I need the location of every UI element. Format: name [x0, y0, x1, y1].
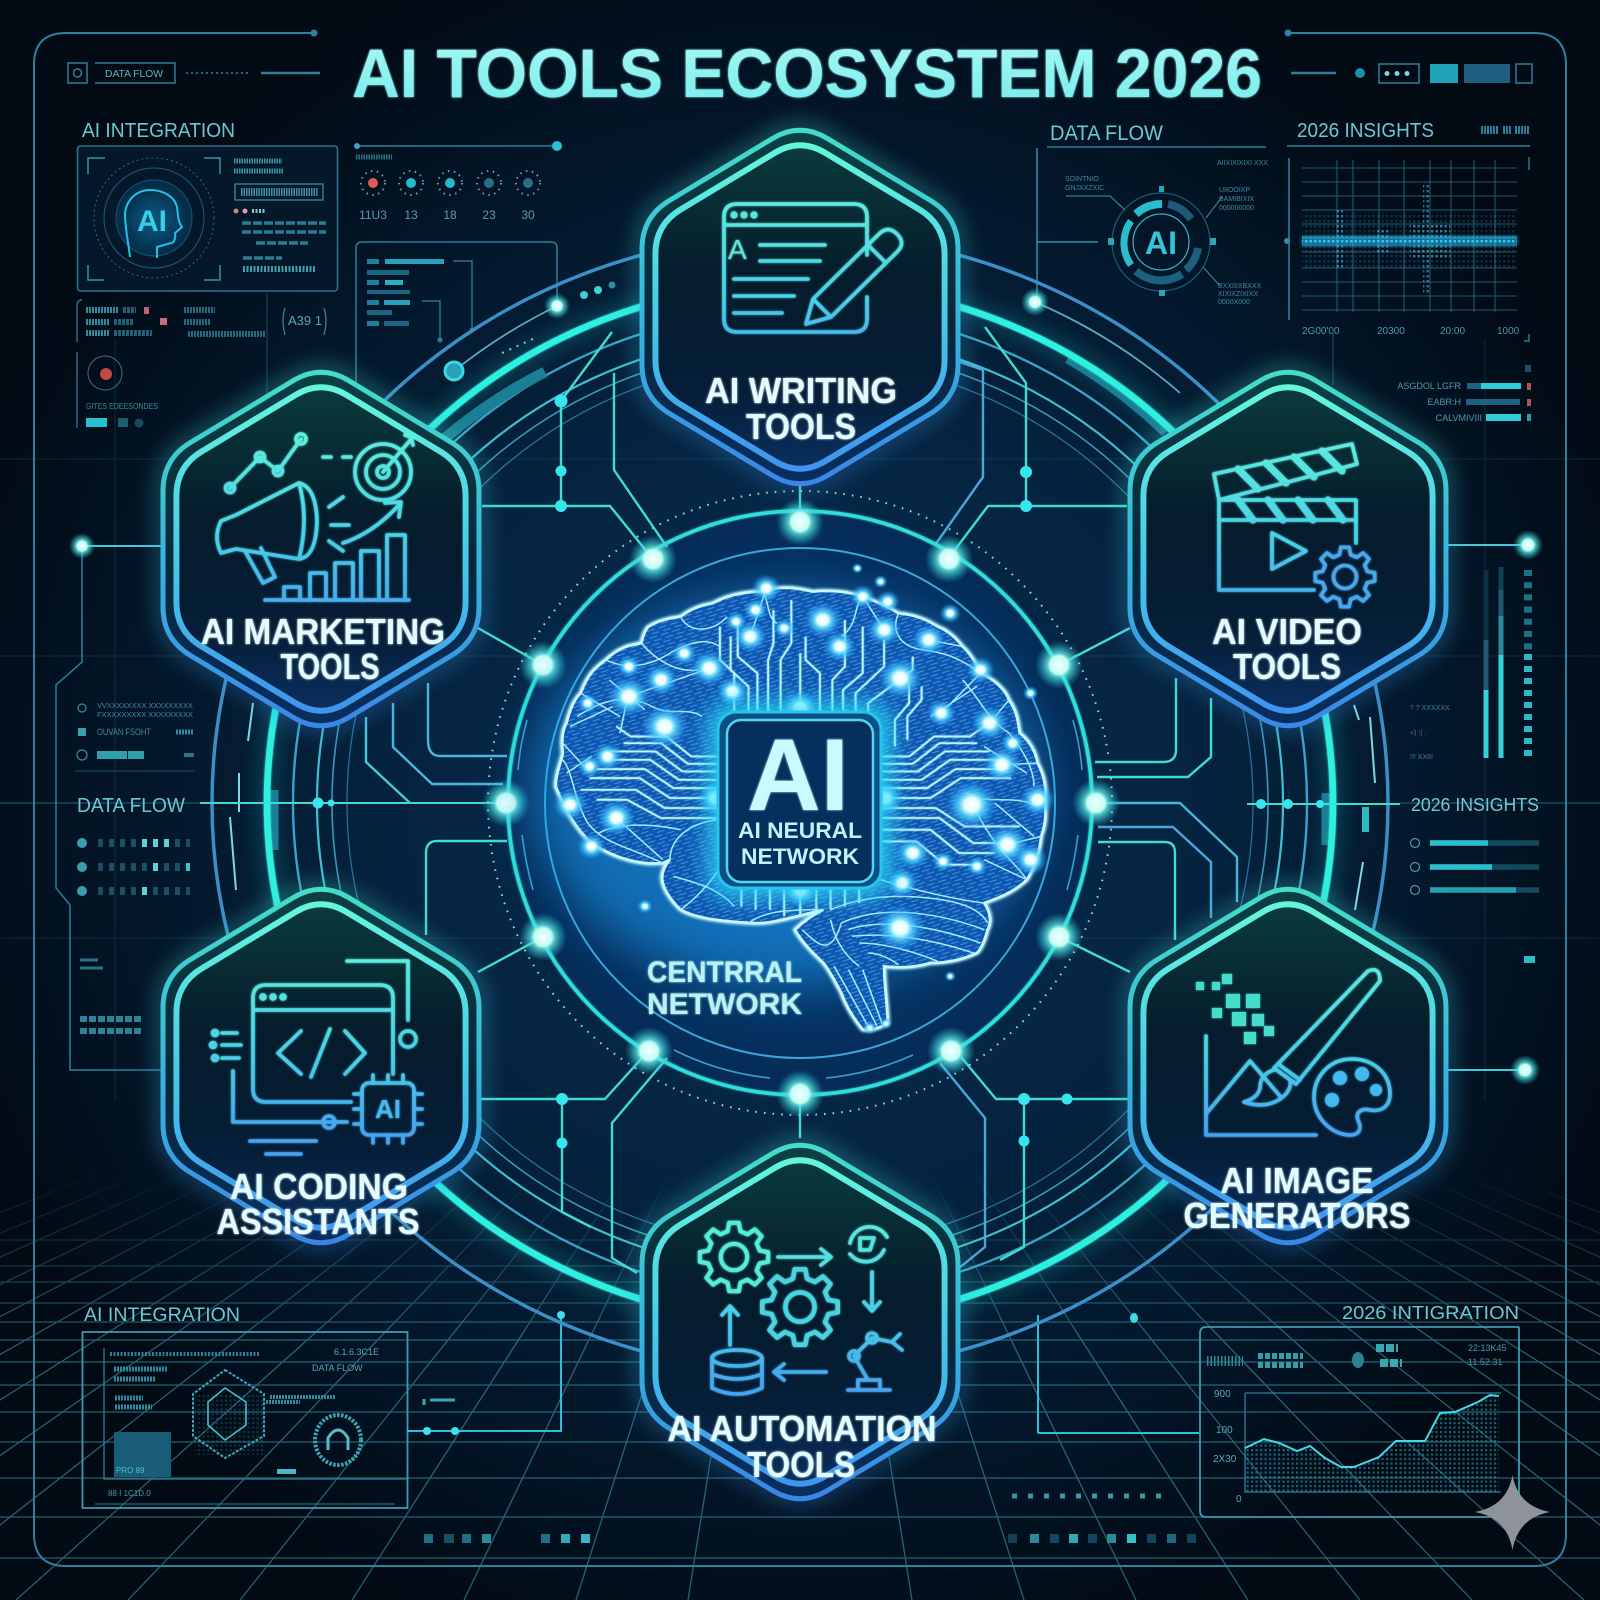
icon: document and pencil: A — [728, 234, 747, 265]
panel: 2026 integration bottom right: 0 — [1236, 1494, 1242, 1505]
panel: data flow top right: GNJXXZXIC — [1065, 185, 1104, 192]
label: AI MARKETING — [201, 611, 445, 652]
panel: status dots: 30 — [521, 208, 535, 222]
panel: side meters right: <) :( . — [1410, 730, 1427, 737]
panel: AI marketing tools — [163, 372, 479, 726]
panel: 2026 insights chart — [1284, 120, 1530, 385]
label — [216, 1166, 420, 1242]
ring nodes top — [445, 288, 1049, 380]
chip AI text: AI — [747, 718, 849, 832]
panel: AI image generators — [1130, 889, 1446, 1243]
heading: data flow: DATA FLOW — [1050, 122, 1163, 145]
brain outline — [556, 588, 1045, 1030]
icon: pixels, brush and palette — [1196, 970, 1390, 1135]
panel: side meters right: ? ? XXXXXX — [1410, 705, 1450, 712]
header strip left — [68, 63, 320, 83]
chip caption: AI NEURAL — [738, 818, 862, 843]
status badge: GITES EDEESONDES — [86, 402, 158, 411]
outer blue ring — [212, 234, 1388, 1372]
central network label: NETWORK — [647, 988, 802, 1021]
hex scan — [193, 1370, 264, 1458]
panel: 2026 integration bottom right: 2X30 — [1213, 1454, 1237, 1465]
legend bars top right: CALVMIVIII — [1436, 413, 1482, 423]
icon: clapperboard and gear — [1214, 444, 1375, 607]
panel: 2026 integration bottom right — [1012, 1302, 1519, 1517]
panel: side data left: FXXXXXXXXX XXXXXXXXX — [97, 712, 193, 719]
dotted ring — [488, 491, 1112, 1115]
icon: sparkle watermark — [1475, 1475, 1550, 1550]
icon: code window and chip — [210, 961, 422, 1154]
panel: data flow top right: 0000X000 — [1218, 299, 1250, 306]
panel: side meters right — [1410, 567, 1528, 761]
circuit traces — [581, 600, 1020, 916]
panel: data flow top right: XIXIXZIXIXX — [1218, 291, 1258, 298]
label: GENERATORS — [1184, 1195, 1410, 1236]
status table — [77, 293, 326, 420]
panel: AI integration bottom left — [82, 1305, 455, 1508]
panel: side data left: VVXXXXXXXX XXXXXXXXX — [97, 703, 193, 710]
panel: 2026 insights chart: 20:00 — [1440, 326, 1465, 337]
central chip — [706, 700, 894, 900]
header strip left: DATA FLOW — [105, 69, 164, 80]
label — [1184, 1160, 1410, 1236]
panel: status dots: 13 — [404, 208, 418, 222]
heading: AI INTEGRATION — [84, 1305, 240, 1326]
network connectors — [82, 327, 1528, 1273]
AI head card — [78, 146, 338, 291]
thick ring glow — [267, 283, 1333, 1323]
panel: data flow top right: AIIXIXIXIXI XXX — [1217, 160, 1268, 167]
panel: 2026 integration bottom right: 100 — [1216, 1425, 1233, 1436]
icon: megaphone and chart — [217, 434, 413, 600]
icon: AI dial: AI — [1145, 225, 1177, 261]
title: AI TOOLS ECOSYSTEM 2026 — [352, 35, 1262, 112]
panel: 2026 insights chart: 2G00'00 — [1302, 326, 1340, 337]
panel: status dots: 23 — [482, 208, 496, 222]
brain nodes — [553, 563, 1056, 1035]
label — [201, 611, 445, 687]
panel: data flow top right — [1037, 122, 1268, 306]
panel: code list — [356, 242, 557, 400]
panel: 2026 integration bottom right: 11.52.31 — [1468, 1357, 1502, 1367]
area chart — [1245, 1393, 1501, 1492]
heading: AI integration: AI INTEGRATION — [82, 120, 235, 142]
panel: AI integration bottom left: PRO 89 — [116, 1466, 145, 1475]
panel: data flow top right: BAMIBIXIX — [1219, 196, 1254, 203]
panel: 2026 insights right — [1410, 795, 1539, 963]
background grid — [0, 340, 1600, 1600]
panel: AI automation tools — [642, 1145, 958, 1499]
network nodes — [69, 394, 1543, 1148]
label: AI CODING — [230, 1166, 408, 1207]
label: TOOLS — [746, 406, 856, 447]
heading: 2026 INTIGRATION — [1342, 1302, 1519, 1323]
panel: side meters right: !!! XXIII — [1410, 754, 1433, 761]
central network label: CENTRRAL — [647, 956, 802, 989]
core rings — [508, 511, 1092, 1095]
panel: 2026 integration bottom right: 900 — [1214, 1389, 1231, 1400]
legend bars top right — [1397, 365, 1531, 423]
icon: code window and chip: AI — [375, 1094, 401, 1124]
label: AI VIDEO — [1212, 611, 1362, 652]
label: AI IMAGE — [1220, 1160, 1374, 1201]
panel: status dots: 11U3 — [359, 208, 387, 222]
connector bottom left — [407, 1311, 565, 1435]
icon: AI head — [94, 158, 214, 278]
panel: data flow top right: SOINTNIO — [1065, 176, 1099, 183]
label: TOOLS — [280, 646, 380, 687]
header strip right — [1291, 64, 1532, 83]
panel: status dots — [354, 141, 562, 222]
central network label — [647, 956, 802, 1021]
panel: data flow top right: UIIOOIXP — [1219, 187, 1250, 194]
panel: AI integration bottom left: 88 I 1C1D.0 — [108, 1489, 151, 1498]
legend bars top right: EABR:H — [1427, 397, 1461, 407]
cortex folds — [563, 588, 1041, 1026]
panel: AI integration top left — [77, 120, 338, 428]
panel: side data left: OUVAN FSOHT — [97, 727, 151, 737]
label — [705, 370, 897, 447]
ring system — [212, 234, 1388, 1372]
vertical meters — [1486, 567, 1501, 758]
panel: AI integration bottom left: DATA FLOW — [312, 1363, 363, 1373]
heading: 2026 INSIGHTS — [1411, 795, 1539, 815]
panel: status dots: 18 — [443, 208, 457, 222]
core disc — [508, 511, 1092, 1095]
bright teal ring — [267, 283, 1333, 1323]
status badge — [77, 352, 158, 428]
panel: AI video tools — [1130, 372, 1446, 726]
bottom square indicators — [424, 1534, 1196, 1543]
panel: data flow top right: BXXIIIXBXXX — [1218, 283, 1262, 290]
thin rings — [293, 309, 1307, 1297]
label: TOOLS — [1233, 646, 1341, 687]
fine streaks — [556, 588, 1045, 1030]
panel: 2026 integration bottom right: 22:13K45 — [1468, 1343, 1507, 1353]
dark band patches — [273, 358, 1327, 850]
icon: AI head: AI — [137, 205, 167, 238]
label: TOOLS — [747, 1444, 855, 1485]
pill meters — [77, 838, 190, 896]
label — [668, 1408, 936, 1485]
panel: 2026 insights chart: 1000 — [1497, 326, 1520, 337]
icon: gears, database and robot arm — [700, 1223, 902, 1394]
panel: side data left — [56, 546, 195, 1070]
waveform — [1302, 182, 1517, 294]
central chip: NETWORK — [741, 844, 859, 869]
code tag: A39 1 — [288, 313, 322, 328]
panel: data flow top right: 000000000 — [1219, 205, 1254, 212]
label: AI WRITING — [705, 370, 897, 411]
panel: 2026 insights chart: 20300 — [1377, 326, 1405, 337]
icon: document and pencil — [724, 204, 902, 332]
panel: AI coding assistants — [163, 889, 479, 1243]
line chart grid — [1302, 160, 1517, 312]
icon: AI dial — [1108, 186, 1216, 296]
legend bars top right: ASGDOL LGFR — [1397, 381, 1461, 391]
panel: AI writing tools — [642, 130, 958, 484]
label: AI AUTOMATION — [668, 1408, 936, 1449]
short arc segments — [454, 302, 1180, 393]
heading: data flow: DATA FLOW — [77, 795, 185, 817]
label — [1212, 611, 1362, 687]
fingerprint dial — [315, 1415, 361, 1465]
heading: 2026 insights: 2026 INSIGHTS — [1297, 120, 1434, 142]
panel: AI integration bottom left: 6.1.6.3C1E — [334, 1347, 379, 1357]
central brain — [530, 563, 1056, 1035]
label: ASSISTANTS — [216, 1201, 420, 1242]
